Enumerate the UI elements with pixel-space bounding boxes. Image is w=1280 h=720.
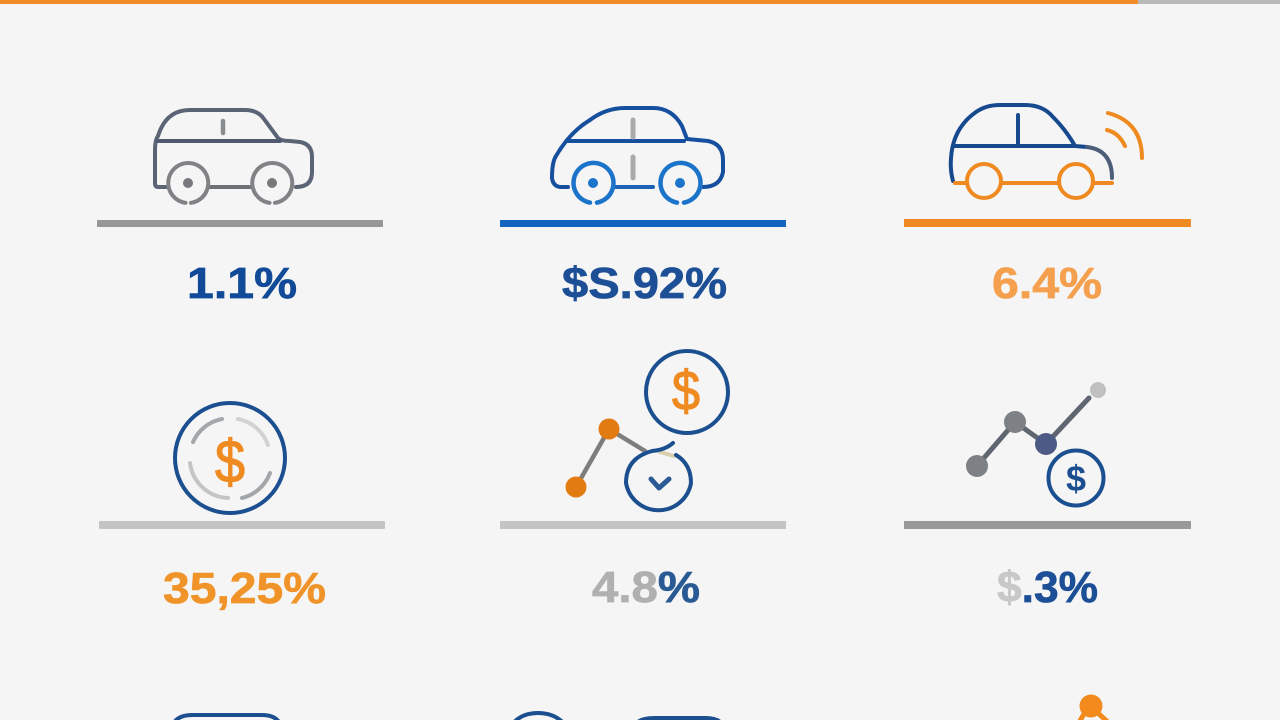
value: $.3%: $.3% <box>997 563 1098 612</box>
value: $S.92%: $S.92% <box>562 259 727 308</box>
icon: cropped orange node, right <box>1078 694 1110 720</box>
icon: cropped rounded top, left <box>173 715 280 720</box>
divider bar: grey <box>97 220 383 227</box>
value: 4.8%: 4.8% <box>592 563 700 612</box>
icon: grey SUV <box>155 110 312 203</box>
value: 35,25%: 35,25% <box>163 564 326 613</box>
icon: cropped rounded top, centre right <box>636 718 722 720</box>
divider bar: grey <box>904 521 1191 529</box>
icon: trend line with small coin <box>966 382 1106 506</box>
progress bar <box>0 0 1280 4</box>
icon: connected car with signal <box>951 105 1142 198</box>
icon: dollar coin: $ <box>215 428 245 495</box>
divider bar: blue <box>500 220 786 227</box>
panel: cropped bottom-row icons <box>173 694 1110 720</box>
value: 1.1%: 1.1% <box>187 259 297 308</box>
divider bar: orange <box>904 219 1191 227</box>
panel: blue car $S.92% <box>500 108 786 308</box>
icon: trend line with small coin: $ <box>1066 458 1086 499</box>
panel: chart and coin 4.8% <box>500 351 786 612</box>
icon: line chart with coin and check circle <box>566 351 728 510</box>
value: 6.4%: 6.4% <box>992 259 1102 308</box>
panel: grey car 1.1% <box>97 110 383 308</box>
icon: cropped circle top, centre <box>511 713 566 720</box>
icon: line chart with coin and check circle: $ <box>672 359 700 422</box>
panel: connected car 6.4% <box>904 105 1191 308</box>
panel: coin 35,25% <box>99 403 385 613</box>
icon: blue sedan <box>552 108 723 203</box>
divider bar: light grey <box>99 521 385 529</box>
panel: trend and coin 5.3% <box>904 382 1191 612</box>
icon: dollar coin <box>175 403 285 513</box>
divider bar: light grey <box>500 521 786 529</box>
